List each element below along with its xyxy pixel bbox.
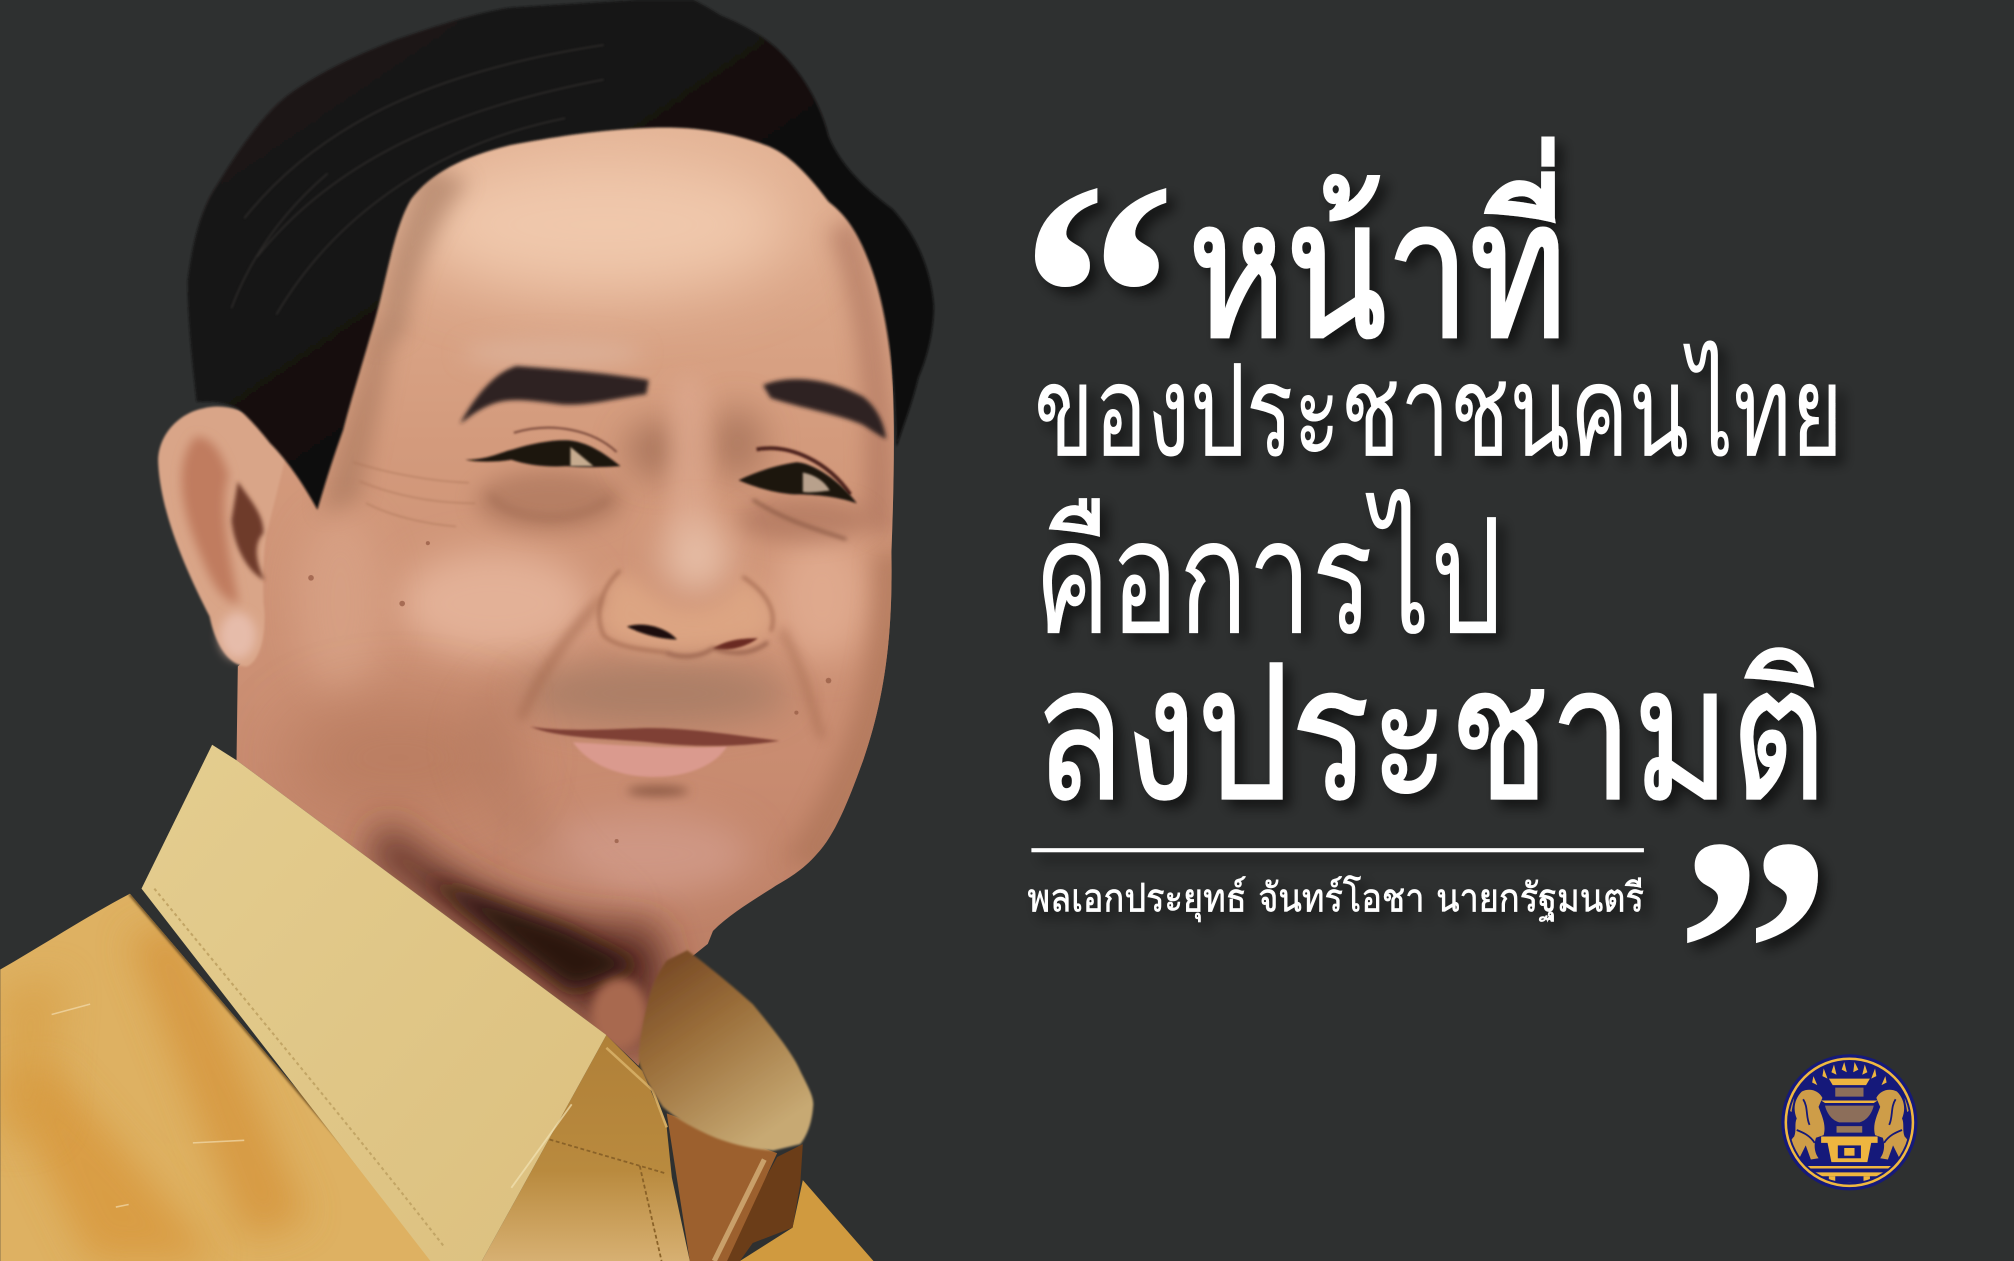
hair [188,0,934,510]
flames [1812,1062,1887,1085]
nose [599,520,773,656]
crow's feet wrinkles [366,466,473,527]
nasolabial folds [520,597,604,719]
quote text block [1020,114,1843,1133]
eye left [465,428,620,518]
portrait photo illustration [0,0,934,1261]
ear [158,406,289,666]
left lion [1790,1090,1824,1160]
divider line [1031,848,1644,852]
headline line 3: คือการไป [1034,449,1503,704]
right lion [1874,1090,1909,1160]
pedestal table [1808,1136,1891,1183]
inner shirt [667,1113,777,1261]
skin marks [308,541,831,843]
fabric flecks [52,1004,244,1207]
head and neck skin [237,113,894,1066]
skin shading [283,154,906,1066]
byline: พลเอกประยุทธ์ จันทร์โอชา นายกรัฐมนตรี [1028,866,1644,930]
government seal emblem [1781,1054,1917,1190]
shirt body [0,894,443,1261]
headline line 4: ลงประชามติ [1034,584,1826,882]
facial features [460,366,886,796]
eye right [739,448,857,539]
closing quotation mark: ” [1675,770,1832,1133]
front collar [142,745,606,1261]
shirt placket [482,1035,690,1261]
mouth [531,727,780,796]
bowl [1821,1079,1878,1133]
opening quotation mark: “ [1020,114,1177,477]
back collar [638,950,813,1151]
headline line 1: หน้าที่ [1188,115,1567,421]
dark inner fold [719,1144,803,1261]
right shoulder [740,1180,873,1261]
eyebrow left [460,366,649,424]
eyebrow right [763,379,886,439]
